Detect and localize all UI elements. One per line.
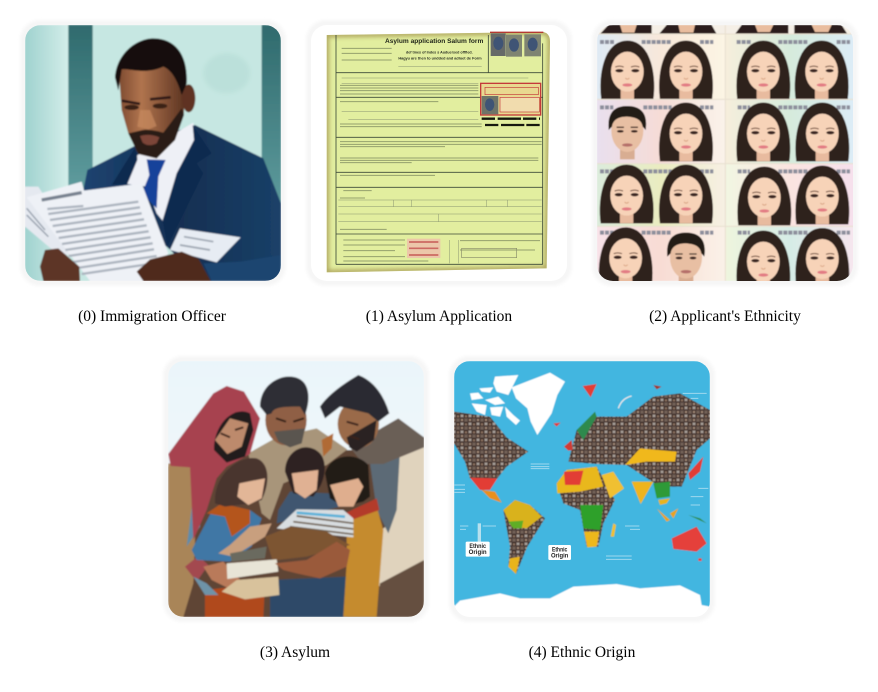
image frame: [20, 20, 286, 286]
panel: Immigration Officer: [20, 20, 286, 325]
Australia: [672, 527, 707, 552]
Africa: [557, 467, 615, 547]
panel: Asylum Application: [306, 20, 572, 325]
pink stamp: [407, 239, 440, 258]
Ethnic Origin label: Ethnic: [469, 544, 487, 550]
Eurasia: [568, 393, 710, 487]
panel: Applicant's Ethnicity: [592, 20, 858, 325]
South America: [503, 500, 545, 574]
image frame: [163, 356, 429, 622]
caption: (2) Applicant's Ethnicity: [649, 308, 801, 325]
woman: [168, 463, 195, 617]
image: refugee family holding books: [168, 361, 424, 617]
Ethnic Origin label: Origin: [551, 553, 569, 559]
label bar: [478, 523, 481, 542]
caption: (3) Asylum: [260, 644, 330, 661]
stamps: [490, 32, 543, 57]
image: aged asylum application form: [327, 32, 550, 272]
panel: Ethnic Origin: [449, 356, 715, 661]
caption: (4) Ethnic Origin: [529, 644, 636, 661]
image: aged asylum application form: Hagyu are then to undded and adloet de Form: [398, 57, 482, 61]
North America: [454, 412, 528, 478]
image: officer reading documents: [25, 25, 281, 281]
books and bundle: [277, 509, 353, 537]
Ethnic Origin label: Ethnic: [552, 547, 568, 553]
image: grid of passport portraits: [597, 25, 854, 289]
Ethnic Origin label: Origin: [469, 550, 487, 556]
Asia colour regions: [602, 472, 624, 498]
image frame: [592, 20, 858, 286]
boys: [277, 492, 340, 523]
top row partial portraits: [600, 25, 847, 34]
Ethnic Origin label: [548, 545, 571, 560]
caption: (0) Immigration Officer: [78, 308, 227, 325]
image: world map of faces: [454, 361, 710, 617]
panel: Asylum: [163, 356, 429, 661]
red stamp box: [481, 83, 541, 125]
polar land: [512, 373, 565, 435]
form title: Asylum application Salum form: [385, 38, 484, 45]
islands: [611, 523, 616, 537]
image frame: [449, 356, 715, 622]
right man: [378, 446, 424, 587]
caption: (1) Asylum Application: [366, 308, 512, 325]
image: aged asylum application form: def tmes of Indes s Auduersed offfied.: [406, 51, 473, 55]
Ethnic Origin label: [466, 542, 490, 557]
image frame: [306, 20, 572, 286]
map tiny labels: [454, 393, 708, 559]
girl: [192, 510, 262, 562]
middle man: [248, 428, 347, 520]
passport header marks: [600, 42, 850, 233]
